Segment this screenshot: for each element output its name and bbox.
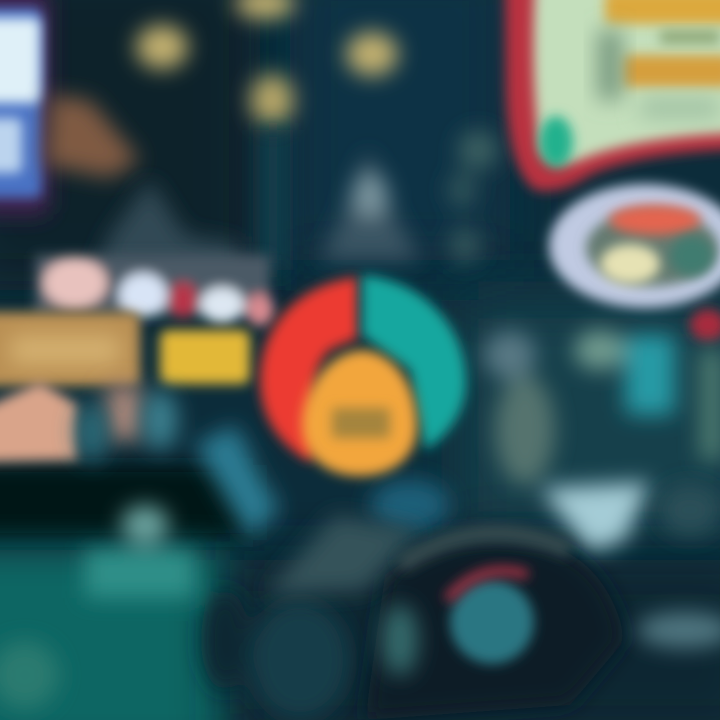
blurred crowd (0, 330, 720, 720)
teal segment (362, 275, 466, 450)
left neon sign (0, 0, 50, 215)
donut chart (260, 275, 466, 476)
red accent (690, 309, 720, 341)
center label block (332, 408, 390, 438)
orange segment (302, 350, 417, 476)
brown storefront (45, 95, 140, 178)
yellow shop signs (0, 312, 250, 462)
striped banner (35, 255, 274, 326)
oval sign (549, 184, 720, 308)
distant buildings (95, 130, 498, 280)
light patch (540, 482, 650, 552)
hanging lanterns (136, 0, 398, 126)
top right neon sign (505, 0, 720, 191)
motorcycle (265, 484, 720, 720)
red segment (260, 277, 358, 462)
